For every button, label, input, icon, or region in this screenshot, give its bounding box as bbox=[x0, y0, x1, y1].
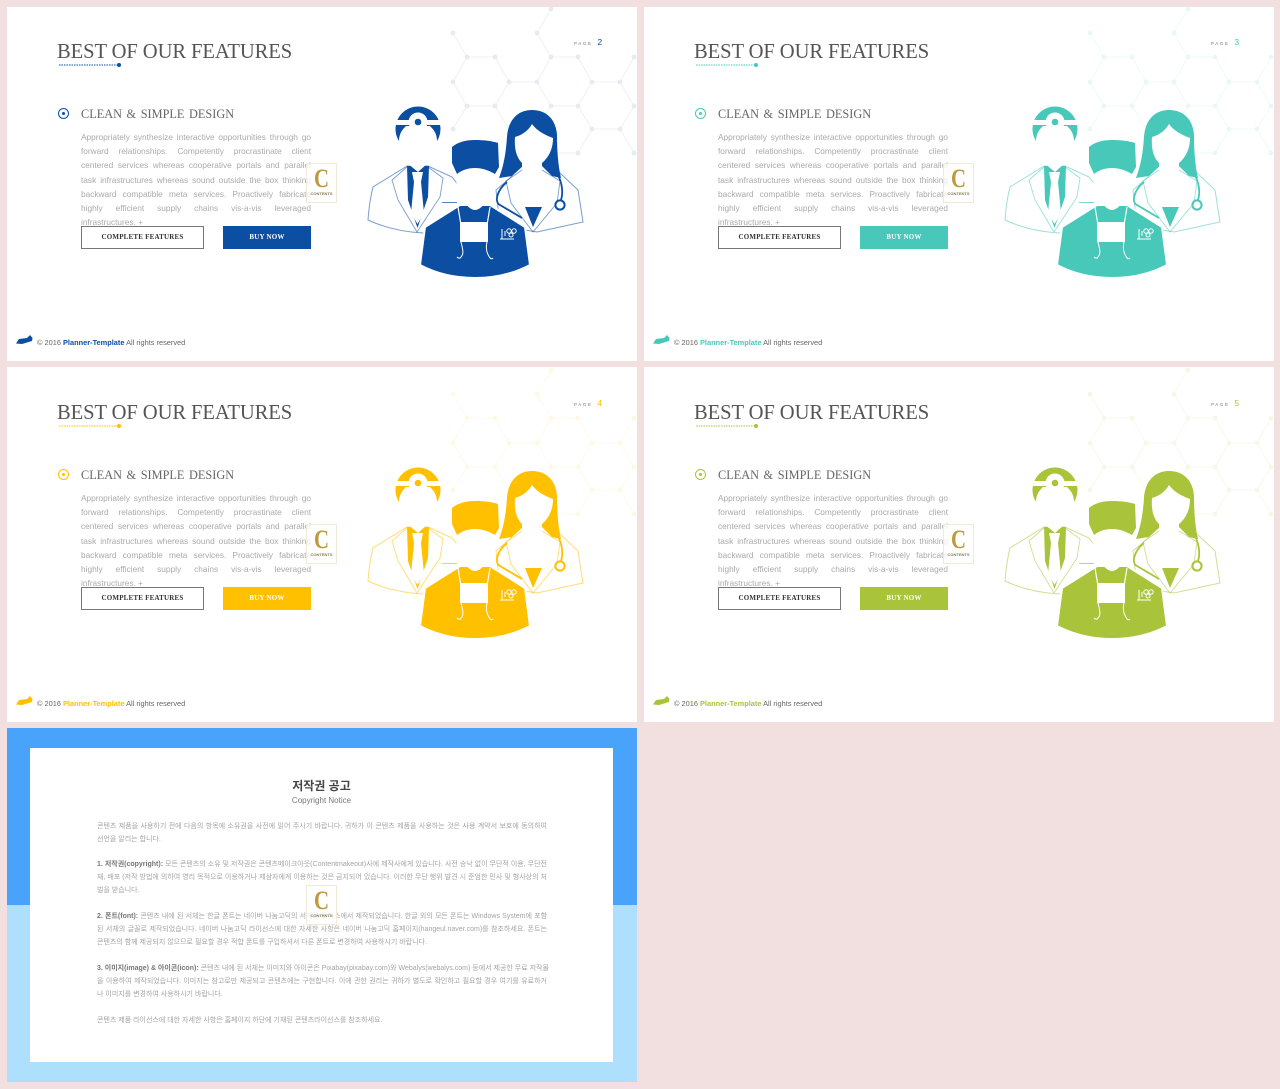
white card bbox=[30, 748, 613, 1062]
copyright heading: 저작권 공고 bbox=[292, 779, 351, 793]
body text: Appropriately synthesize interactive opportunities through go bbox=[718, 493, 948, 503]
body text: centered services whereas cooperative portals and parallel bbox=[718, 521, 948, 531]
body text: task infrastructures whereas sound outside the box thinking bbox=[81, 536, 311, 546]
subheading: CLEAN & SIMPLE DESIGN bbox=[81, 106, 234, 120]
watermark: C bbox=[314, 525, 329, 554]
filled button bbox=[223, 587, 311, 610]
body text: highly efficient supply chains vis-a-vis leveraged bbox=[81, 564, 311, 574]
body text: infrastructures. + bbox=[718, 217, 780, 227]
filled button bbox=[860, 226, 948, 249]
filled button bbox=[860, 587, 948, 610]
filled button bbox=[223, 226, 311, 249]
page number: PAGE 2 bbox=[574, 37, 602, 47]
clause 2: 2. 폰트(font): 콘텐츠 내에 된 서체는 한글 폰트는 네이버 나눔고딕의 서체로 오피스에서 제작되었습니다. 한글 외의 모든 폰트는 Windows System에 포함 bbox=[97, 913, 547, 920]
title underline bbox=[59, 424, 121, 428]
intro text line 2: 선언을 알리는 합니다. bbox=[97, 836, 161, 843]
body text: infrastructures. + bbox=[81, 578, 143, 588]
panel: slide page 3 teal bbox=[644, 7, 1274, 361]
body text: forward relationships. Competently procrastinate client bbox=[718, 507, 948, 517]
clause 1 line 3: 벌을 받습니다. bbox=[97, 887, 140, 894]
panel: slide page 5 green bbox=[644, 367, 1274, 722]
panel: slide page 2 blue bbox=[7, 7, 637, 361]
body text: backward compatible meta services. Proactively fabricate bbox=[81, 550, 311, 560]
watermark: CONTENTS bbox=[310, 191, 332, 196]
illustration: hexagon pattern and medical team bbox=[653, 368, 1274, 705]
subheading: CLEAN & SIMPLE DESIGN bbox=[718, 468, 871, 482]
title: BEST OF OUR FEATURES bbox=[694, 40, 929, 62]
watermark bbox=[306, 885, 337, 925]
page number: PAGE 3 bbox=[1211, 37, 1239, 47]
title underline bbox=[696, 63, 758, 67]
watermark: CONTENTS bbox=[310, 913, 332, 918]
body text: Appropriately synthesize interactive opportunities through go bbox=[81, 493, 311, 503]
license note: 콘텐츠 제품 라이선스에 대한 자세한 사항은 홈페이지 하단에 기재된 콘텐츠라이선스를 참조하세요. bbox=[97, 1017, 382, 1024]
page number: PAGE 4 bbox=[574, 398, 602, 408]
body text bbox=[718, 493, 948, 588]
clause 2 line 2: 된 서체의 글꼴로 제작되었습니다. 네이버 나눔고딕 라이선스에 대한 자세한 사항은 네이버 나눔고딕 홈페이지(hangeul.naver.com)를 참조하세요. 폰트는 bbox=[97, 926, 547, 933]
body text: Appropriately synthesize interactive opportunities through go bbox=[718, 132, 948, 142]
outline button bbox=[81, 587, 204, 610]
footer: © 2016 Planner-Template All rights reserved bbox=[674, 699, 822, 708]
outline button bbox=[718, 226, 841, 249]
panel: copyright background bbox=[7, 728, 637, 1082]
title: BEST OF OUR FEATURES bbox=[57, 402, 292, 424]
outline button bbox=[81, 226, 204, 249]
outline button bbox=[718, 587, 841, 610]
body text: infrastructures. + bbox=[81, 217, 143, 227]
watermark: CONTENTS bbox=[948, 552, 970, 557]
body text: infrastructures. + bbox=[718, 578, 780, 588]
filled button: BUY NOW bbox=[886, 594, 922, 602]
watermark bbox=[306, 524, 337, 564]
body text: centered services whereas cooperative portals and parallel bbox=[718, 160, 948, 170]
body text: highly efficient supply chains vis-a-vis leveraged bbox=[718, 564, 948, 574]
footer: © 2016 Planner-Template All rights reserved bbox=[37, 338, 185, 347]
bullet icon bbox=[695, 108, 706, 119]
title: BEST OF OUR FEATURES bbox=[694, 402, 929, 424]
body text bbox=[81, 493, 311, 588]
title: BEST OF OUR FEATURES bbox=[57, 40, 292, 62]
body text: forward relationships. Competently procrastinate client bbox=[718, 146, 948, 156]
title underline bbox=[696, 424, 758, 428]
body text: task infrastructures whereas sound outside the box thinking bbox=[718, 175, 948, 185]
illustration: hexagon pattern and medical team bbox=[16, 7, 636, 344]
body text: backward compatible meta services. Proactively fabricate bbox=[718, 550, 948, 560]
filled button: BUY NOW bbox=[249, 594, 285, 602]
watermark bbox=[943, 524, 974, 564]
body text: backward compatible meta services. Proactively fabricate bbox=[718, 189, 948, 199]
footer: © 2016 Planner-Template All rights reserved bbox=[37, 699, 185, 708]
footer: © 2016 Planner-Template All rights reserved bbox=[674, 338, 822, 347]
watermark bbox=[943, 163, 974, 203]
body text: task infrastructures whereas sound outside the box thinking bbox=[81, 175, 311, 185]
bullet icon bbox=[58, 469, 69, 480]
clause 3 line 2: 을 이용하여 제작되었습니다. 이미지는 참고로만 제공되고 콘텐츠에는 구현합니다. 이에 관한 권리는 귀하가 별도로 확인하고 필요할 경우 여기를 유료하거 bbox=[97, 978, 547, 985]
watermark: C bbox=[314, 164, 329, 193]
subheading: CLEAN & SIMPLE DESIGN bbox=[81, 468, 234, 482]
intro text: 콘텐츠 제품을 사용하기 전에 다음의 항목에 소유권을 사전에 읽어 주시기 바랍니다. 귀하가 이 콘텐츠 제품을 사용하는 것은 사용 계약서 보호에 동의하여 bbox=[97, 823, 547, 830]
watermark: CONTENTS bbox=[310, 552, 332, 557]
title underline bbox=[59, 63, 121, 67]
outline button: COMPLETE FEATURES bbox=[101, 594, 184, 602]
copyright subheading: Copyright Notice bbox=[292, 796, 351, 805]
watermark: C bbox=[951, 164, 966, 193]
body text: Appropriately synthesize interactive opportunities through go bbox=[81, 132, 311, 142]
body text: highly efficient supply chains vis-a-vis leveraged bbox=[81, 203, 311, 213]
clause 3: 3. 이미지(image) & 아이콘(icon): 콘텐츠 내에 된 서체는 이미지와 아이콘은 Pixabay(pixabay.com)와 Webalys(webalys.com) 등에서 제공한 무료 저작물 bbox=[97, 965, 549, 972]
body text: backward compatible meta services. Proactively fabricate bbox=[81, 189, 311, 199]
watermark: CONTENTS bbox=[948, 191, 970, 196]
illustration: hexagon pattern and medical team bbox=[653, 7, 1274, 344]
body text: highly efficient supply chains vis-a-vis leveraged bbox=[718, 203, 948, 213]
clause 1 line 2: 재, 배포 (저작 방법에 의하여 영리 목적으로 이용하거나 제삼자에게 이용하는 것은 금지되어 있습니다. 이러한 무단 행위 발견 시 준엄한 민사 및 형사상의 처 bbox=[97, 874, 547, 881]
clause 1: 1. 저작권(copyright): 모든 콘텐츠의 소유 및 저작권은 콘텐츠메이크아웃(Contentmakeout)사에 제작사에게 있습니다. 사전 승낙 없이 무단적 이용, 무단전 bbox=[97, 861, 547, 868]
outline button: COMPLETE FEATURES bbox=[738, 233, 821, 241]
filled button: BUY NOW bbox=[886, 233, 922, 241]
body text: centered services whereas cooperative portals and parallel bbox=[81, 521, 311, 531]
body text: forward relationships. Competently procrastinate client bbox=[81, 507, 311, 517]
clause 3 line 3: 나 이미지를 변경하여 사용하시기 바랍니다. bbox=[97, 991, 223, 998]
body text: forward relationships. Competently procrastinate client bbox=[81, 146, 311, 156]
bullet icon bbox=[58, 108, 69, 119]
page number: PAGE 5 bbox=[1211, 398, 1239, 408]
outline button: COMPLETE FEATURES bbox=[101, 233, 184, 241]
clause 2 line 3: 콘텐츠의 함께 제공되지 않으므로 필요할 경우 적합 폰트를 구입하셔서 다른 폰트로 변경하여 사용하시기 바랍니다. bbox=[97, 939, 427, 946]
subheading: CLEAN & SIMPLE DESIGN bbox=[718, 106, 871, 120]
watermark: C bbox=[951, 525, 966, 554]
body text: task infrastructures whereas sound outside the box thinking bbox=[718, 536, 948, 546]
body text bbox=[81, 132, 311, 227]
bullet icon bbox=[695, 469, 706, 480]
body text bbox=[718, 132, 948, 227]
watermark: C bbox=[314, 886, 329, 915]
watermark bbox=[306, 163, 337, 203]
panel: slide page 4 yellow bbox=[7, 367, 637, 722]
body text: centered services whereas cooperative portals and parallel bbox=[81, 160, 311, 170]
outline button: COMPLETE FEATURES bbox=[738, 594, 821, 602]
illustration: hexagon pattern and medical team bbox=[16, 368, 636, 705]
filled button: BUY NOW bbox=[249, 233, 285, 241]
